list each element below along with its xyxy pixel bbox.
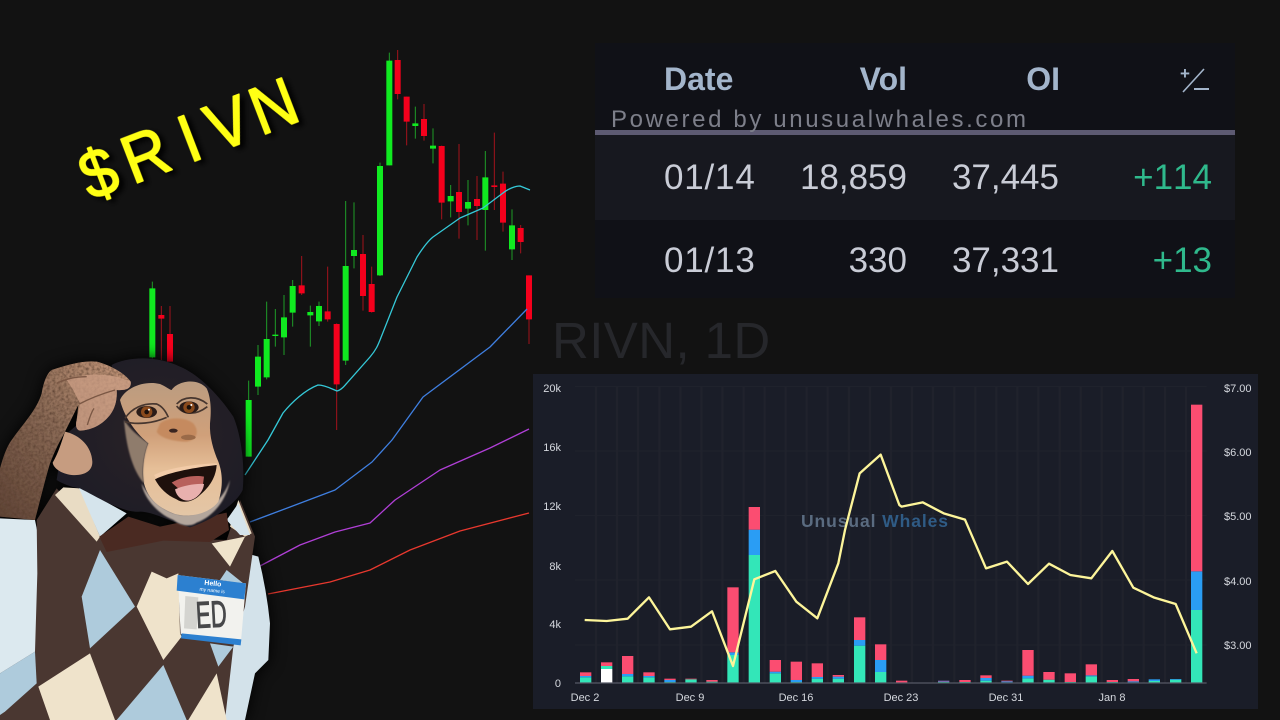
- fingers: [67, 375, 131, 431]
- right axis labels: [1224, 383, 1252, 652]
- top right cream diamond: [212, 537, 245, 567]
- row 01/13: 37,331: [952, 241, 1059, 280]
- row 01/14: +114: [1133, 158, 1212, 197]
- eye sockets: [125, 398, 207, 423]
- candlestick chart: [152, 50, 529, 457]
- green bar segments: [580, 555, 1202, 683]
- small blue diamond: [210, 643, 233, 667]
- date labels: Dec 23: [884, 692, 918, 704]
- name tag: [177, 575, 246, 645]
- finger creases: [57, 377, 115, 425]
- left shoulder cream: [55, 487, 100, 542]
- lower right cream diamond: [188, 673, 227, 720]
- lower left blue diamond: [0, 652, 37, 715]
- green candle wicks: [152, 53, 512, 457]
- lower cream diamond: [38, 653, 115, 720]
- table headers: Date: [664, 61, 733, 97]
- cream diamond: [137, 572, 182, 660]
- red bar segments: [580, 405, 1202, 683]
- red candle wicks: [161, 50, 529, 430]
- cyan moving average: [245, 186, 530, 475]
- row 01/14: 01/14: [664, 158, 756, 197]
- row 01/13: [664, 241, 1212, 280]
- mouth: [154, 463, 217, 502]
- arm and hand: [0, 361, 131, 520]
- row 01/13: 01/13: [664, 241, 756, 280]
- vest: [0, 487, 255, 720]
- left sleeve: [0, 518, 57, 673]
- fur and head: [57, 358, 243, 527]
- row 01/14: 18,859: [800, 158, 907, 197]
- date labels: Dec 9: [676, 692, 704, 704]
- purple moving average: [260, 429, 529, 566]
- row 01/13: +13: [1153, 241, 1212, 280]
- grid: [575, 387, 1207, 683]
- lower blue diamond: [117, 665, 187, 720]
- tag name ED: ED: [195, 592, 228, 636]
- watermark: Unusual Whales: [801, 511, 948, 531]
- tag shaded patch: [184, 596, 198, 629]
- header divider: [595, 130, 1235, 135]
- table headers: [664, 61, 1060, 97]
- plus minus header icon: [1180, 64, 1209, 92]
- ear: [53, 432, 92, 475]
- right axis labels: $7.00: [1224, 383, 1252, 395]
- tag top band: [177, 575, 246, 599]
- powered by note: Powered by unusualwhales.com: [611, 106, 1026, 133]
- left axis labels: 20k: [543, 383, 561, 395]
- left eye: [136, 406, 157, 418]
- cheek fur shading: [124, 420, 148, 483]
- right axis labels: $5.00: [1224, 511, 1252, 523]
- tag hello text: Hello: [204, 580, 222, 589]
- doji bodies: [275, 123, 433, 336]
- illustration: chimp mascot: [0, 358, 270, 720]
- left axis labels: 12k: [543, 501, 561, 513]
- stacked volume bars: [575, 405, 1207, 683]
- right shoulder cream: [230, 500, 252, 537]
- left axis labels: 16k: [543, 442, 561, 454]
- moving average lines: [245, 186, 530, 594]
- beard: [142, 480, 230, 525]
- tag my name is text: my name is: [199, 587, 226, 595]
- red candle bodies: [161, 60, 529, 384]
- table headers: Vol: [860, 61, 907, 97]
- red moving average: [268, 513, 529, 594]
- right axis labels: $3.00: [1224, 640, 1252, 652]
- right sleeve: [220, 553, 270, 720]
- green candle bodies: [152, 61, 512, 457]
- blue sliver by tag: [220, 570, 243, 583]
- plus minus header icon: +: [1180, 64, 1190, 83]
- date labels: Dec 16: [779, 692, 813, 704]
- row 01/14: 37,445: [952, 158, 1059, 197]
- table headers: OI: [1026, 61, 1060, 97]
- panel: volume and price chart: [533, 374, 1258, 709]
- blue bar segments: [580, 530, 1202, 682]
- date labels: Dec 2: [571, 692, 599, 704]
- price line: [585, 455, 1197, 666]
- tag bottom band: [181, 633, 241, 645]
- title: $RIVN: $RIVN: [69, 62, 308, 215]
- date labels: [571, 692, 1125, 704]
- row 01/13: 330: [849, 241, 907, 280]
- date labels: Jan 8: [1099, 692, 1125, 704]
- faded chart label: RIVN, 1D: [552, 312, 771, 369]
- right axis labels: $6.00: [1224, 447, 1252, 459]
- baseline: [575, 681, 1207, 685]
- blue diamond: [82, 550, 135, 648]
- face: [120, 381, 222, 516]
- right axis labels: $4.00: [1224, 576, 1252, 588]
- left axis labels: 4k: [549, 619, 561, 631]
- left axis labels: 8k: [549, 561, 561, 573]
- nose: [157, 418, 197, 442]
- panel: options table: [595, 43, 1235, 298]
- white bar segment: [601, 669, 612, 683]
- bow tie: [99, 513, 229, 552]
- date labels: Dec 31: [989, 692, 1023, 704]
- shirt collar: [78, 487, 250, 537]
- row 01/14: [664, 158, 1212, 197]
- left axis labels: [543, 383, 561, 690]
- right eye: [179, 401, 199, 413]
- left axis labels: 0: [555, 678, 561, 690]
- highlighted row: [595, 135, 1235, 220]
- blue moving average: [250, 309, 527, 522]
